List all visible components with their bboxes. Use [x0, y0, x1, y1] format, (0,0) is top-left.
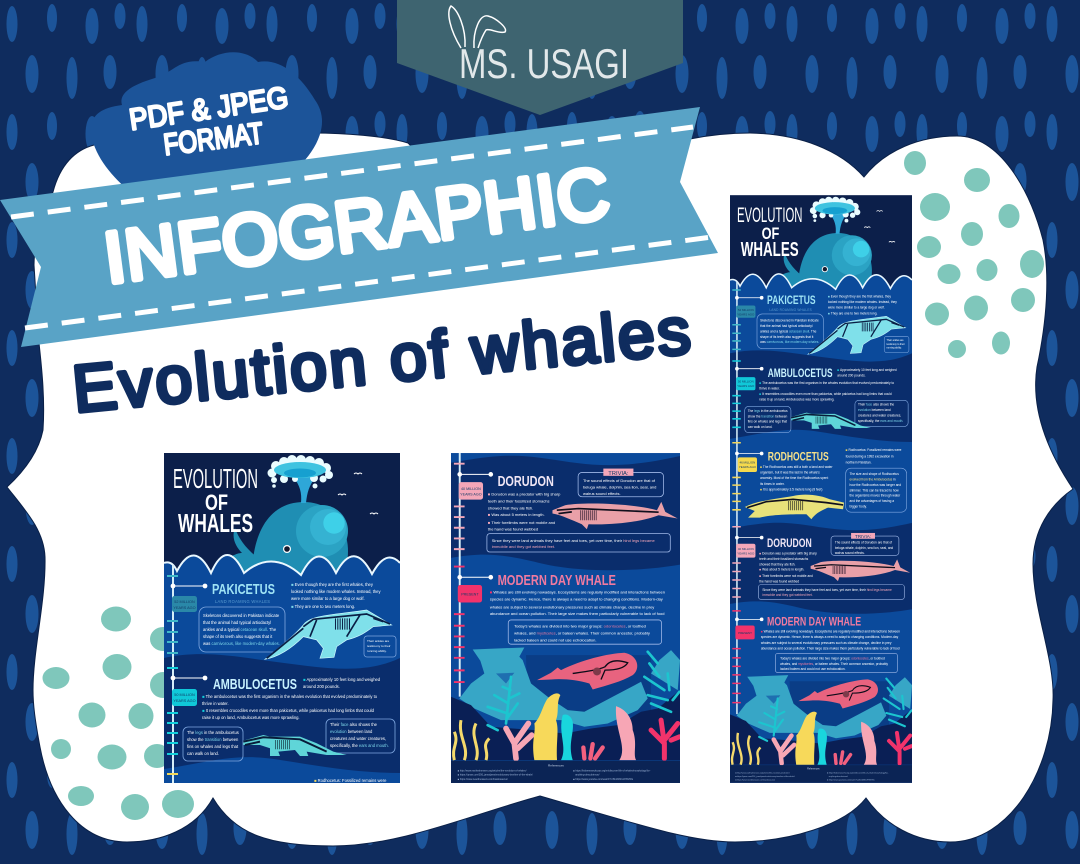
age tag [736, 305, 755, 318]
connector [173, 677, 205, 679]
facts text: ■ It resembles crocodiles even more than pakicetus, while pakicetus had long limbs that could [202, 708, 375, 713]
callout: face: specifically, the ears and mouth. [330, 743, 389, 748]
age tag: PRESENT [461, 593, 479, 597]
callout: skeletons: ankles and a typical cetacean skull. The [203, 627, 277, 632]
age tag [736, 377, 755, 390]
facts text: its times in water. [760, 482, 785, 486]
paragraph: whales are subject to several evolutionary pressures such as climate change, decline in prey [490, 604, 654, 609]
references: References [807, 768, 820, 771]
poster title: EVOLUTION [737, 202, 802, 227]
poster preview 1: top of infographic [164, 453, 400, 783]
heading: DORUDON [767, 538, 812, 550]
callout: size and shape: bigger body. [850, 505, 867, 509]
callout: face [326, 719, 395, 753]
facts text [828, 295, 897, 316]
references [451, 761, 680, 783]
trivia box: beluga whale, dolphin, sea lion, seal, and [583, 484, 656, 489]
poster title: WHALES [741, 239, 799, 261]
paragraph: ■ Whales are still evolving nowadays. Ecosystems are regularly modified and interactions between [490, 590, 665, 595]
facts text: ■ It is approximately 3.5 meters long (8 feet) [760, 488, 822, 492]
facts text: ■ The Rodhocetus was still a both a land and water [760, 465, 833, 469]
callout: skeletons: that the animal had typical artiodactyl [203, 620, 271, 625]
logo: Ms. Usagi [397, 0, 683, 115]
callout: groups [508, 620, 662, 644]
coral: yellow leaf [533, 693, 560, 760]
subtitle: LAND ROAMING WHALES [215, 599, 270, 604]
callout: face: Their face also shows the [330, 722, 378, 727]
night sky [730, 195, 912, 292]
facts text: ■ Was about 5 meters in length. [488, 512, 545, 517]
coral: pink leaf [616, 706, 636, 760]
facts text: ■ They are one to two meters long. [291, 604, 355, 609]
age tag: YEARS AGO [173, 699, 196, 703]
night sky [164, 453, 400, 578]
banner title: INFOGRAPHIC [100, 153, 614, 299]
callout: face: Their face also shows the [858, 403, 894, 407]
coral: yellow seaweed [454, 720, 489, 760]
callout: skeletons: that the animal had typical artiodactyl [760, 324, 813, 328]
callout: skeletons [757, 314, 823, 349]
references [730, 765, 912, 783]
facts text [759, 552, 817, 583]
age tag: YEARS AGO [739, 465, 757, 469]
trivia box: walrus sound effects. [835, 551, 865, 555]
facts text [291, 582, 381, 609]
skeleton: rodhocetus [745, 495, 844, 519]
facts text: showed that they ate fish. [759, 562, 796, 566]
age tag: 50 MILLION [174, 693, 195, 697]
callout: legs [183, 727, 243, 761]
callout: legs: can walk on land. [187, 751, 219, 756]
heading: AMBULOCETUS [768, 368, 833, 380]
facts text: northern Pakistan. [846, 461, 872, 465]
callout: face: evolution between land [330, 729, 373, 734]
facts text: ■ Approximately 10 feet long and weighed [837, 368, 897, 372]
poster title: OF [762, 224, 779, 243]
callout: ankles [364, 636, 396, 657]
skeleton: pakicetus [265, 610, 392, 659]
poster title [173, 463, 258, 538]
age tag [459, 482, 483, 500]
facts text: ■ Was about 5 meters in length. [759, 568, 804, 572]
callout: ankles: running ability. [887, 347, 902, 350]
badge label line 1: PDF & JPEG [127, 81, 290, 137]
age tag: PRESENT [738, 631, 752, 635]
callout: skeletons: ankles and a typical cetacean skull. The [760, 329, 817, 333]
references: ■ http://www.earthwitnesses.org/articles/the-evolution-of-whales/ [735, 772, 790, 775]
callout: skeletons: Skeletons discovered in Pakistan indicate [760, 319, 819, 323]
section: Pakicetus [171, 581, 396, 659]
coral: left teal kelp [488, 677, 519, 730]
coral: cyan kelp [561, 715, 573, 760]
heading: DORUDON [498, 474, 554, 490]
teaser: Rodhocetus text: ■ Rodhocetus: Fossilized remains were [314, 778, 387, 783]
age tag [172, 596, 197, 612]
age tag: 52 MILLION [174, 600, 195, 604]
callout: face: evolution between land [858, 408, 891, 412]
callout: skeletons: was carnivorous, like modern-day whales. [760, 340, 819, 344]
callout: legs [745, 406, 791, 433]
age tag: YEARS AGO [737, 552, 755, 556]
callout: face [855, 400, 908, 427]
coral: red branch [651, 720, 679, 758]
age tag [172, 689, 197, 706]
references: ■ https://qmaz.com/356_jama/jama/evolutionary-timeline-of-the-whale/ [458, 774, 533, 777]
paragraph [490, 590, 665, 616]
facts text: looked nothing like modern whales. Instead, they [828, 300, 897, 304]
references: ■ https://qmaz.com/356_jama/jama/evolutionary-timeline-of-the-whale/ [735, 775, 795, 778]
facts text: thrive in water. [202, 701, 229, 706]
teal dots: right group [904, 151, 1044, 358]
section: Dorudon [735, 533, 910, 599]
facts text [202, 677, 381, 720]
poster preview 3: full-length infographic [730, 195, 912, 783]
seabed illustration [451, 647, 680, 760]
trivia box [831, 533, 899, 555]
callout: size and shape: slimmer. This can be traced to how [850, 488, 899, 492]
section: Modern day whale [457, 573, 665, 644]
facts text [488, 492, 561, 532]
age tag: YEARS AGO [460, 493, 482, 497]
callout: face: specifically, the ears and mouth. [858, 419, 903, 423]
callout: legs: can walk on land. [748, 425, 772, 429]
facts text: ancestry. Most of the time the Rodhocetus spent [760, 476, 828, 480]
callout: legs: show the transition between [187, 737, 239, 742]
connector [460, 576, 491, 578]
subtitle: Evolution of whales [69, 293, 693, 426]
subtitle: LAND ROAMING WHALES [769, 308, 812, 312]
coral: small red [583, 744, 603, 758]
facts text: teeth and their fossilized stomachs [488, 499, 549, 504]
callout: groups: lacked baleen and could not use echolocation. [514, 637, 596, 642]
callout: legs: Since they were land animals they have feet and toes, yet over time, their hind legs became [762, 588, 892, 592]
connector [460, 473, 491, 475]
callout: ankles: Their ankles are [367, 639, 389, 643]
trivia box: TRIVIA: [855, 534, 871, 539]
paragraph: abundance and ocean pollution. Their large size makes them particularly vulnerable to lack of food [490, 611, 665, 616]
poster title: WHALES [178, 508, 253, 538]
callout: skeletons: shape of its teeth also suggests that it [203, 634, 273, 639]
poster title: EVOLUTION [173, 463, 258, 494]
facts text: ■ Approximately 10 feet long and weighed [303, 677, 381, 682]
facts text: around 200 pounds. [837, 373, 866, 377]
heading: AMBULOCETUS [213, 676, 297, 693]
references: ■ https://www.newdinosaurs.com/basilosaurus/ [735, 779, 775, 782]
callout: groups: Today's whales are divided into two major groups: odontocetes, or toothed [780, 656, 885, 660]
section: Ambulocetus [735, 367, 908, 433]
whale illustration [770, 197, 895, 291]
facts text [760, 448, 902, 492]
age tag [735, 626, 755, 639]
poster preview 2: bottom of infographic [451, 453, 680, 783]
callout: groups: lacked baleen and could not use echolocation. [780, 667, 846, 671]
pink whale [537, 653, 637, 689]
badge: PDF and JPEG format [90, 52, 322, 200]
timeline [167, 565, 178, 783]
section: Pakicetus [735, 295, 909, 354]
logo rabbit ears [449, 6, 505, 48]
callout: face: creatures and water creatures, [330, 736, 386, 741]
ocean body with scalloped waves [164, 555, 400, 783]
skeleton: pakicetus [808, 316, 906, 354]
facts text: ■ Even though they are the first whales, they [828, 295, 891, 299]
trivia box: The sound effects of Dorudon are that of [835, 541, 892, 545]
ocean bands [451, 453, 680, 783]
age tag: 40 MILLION [738, 547, 754, 551]
callout: size and shape: the organisms moves through water [850, 494, 901, 498]
callout: groups: whales, and mysticetes, or baleen whales. Their common ancestor, probably [514, 630, 650, 635]
references: ■ https://kidsresearchcorp.org/en/discover/life-of-whales/morphology/for- [573, 769, 651, 772]
seabed illustration [730, 675, 912, 765]
age tag [736, 544, 755, 558]
section: Ambulocetus [171, 676, 395, 761]
callout: legs [759, 585, 904, 599]
callout: legs: fins on whales and legs that [187, 744, 239, 749]
connector [737, 368, 762, 370]
whale illustration [216, 455, 378, 577]
age tag: YEARS AGO [737, 384, 755, 388]
connector [737, 453, 762, 455]
references: References [548, 763, 564, 767]
age tag: 40 MILLION [461, 487, 481, 491]
callout: size and shape [846, 468, 907, 512]
callout: legs: immobile and they got webbed feet. [762, 593, 813, 597]
coral: right teal kelp [644, 652, 679, 712]
logo wordmark: MS. USAGI [459, 40, 629, 87]
callout: legs: fins on whales and legs that [748, 420, 787, 424]
connector [737, 618, 762, 620]
facts text: were more similar to a large dog or wolf. [291, 596, 365, 601]
callout: ankles: Their ankles are [887, 339, 904, 342]
section: Rodhocetus [735, 448, 907, 519]
callout: size and shape: evolved from the Ambulocetus in [850, 478, 896, 482]
skeleton: dorudon [811, 559, 910, 581]
callout: face: creatures and water creatures, [858, 414, 901, 418]
paragraph: ■ Whales are still evolving nowadays. Ecosystems are regularly modified and interactions between [761, 629, 900, 633]
heading: MODERN DAY WHALE [767, 616, 861, 628]
callout: legs: The legs in the ambulocetus [187, 730, 239, 735]
trivia box: beluga whale, dolphin, sea lion, seal, and [835, 546, 893, 550]
trivia box [578, 469, 664, 497]
facts text: ■ The ambulocetus was the first organism in the whales evolution that evolved predominately to [202, 694, 378, 699]
facts text: ■ Dorudon was a predator with big sharp [759, 552, 817, 556]
facts text: ■ The ambulocetus was the first organism in the whales evolution that evolved predominately to [759, 381, 894, 385]
skeleton: ambulocetus [791, 413, 871, 429]
facts text: organism, but it was the last in the whale's [760, 471, 820, 475]
callout: legs [487, 534, 670, 552]
callout: ankles: testimony to their [367, 644, 391, 648]
age tag: 52 MILLION [738, 308, 754, 312]
callout: skeletons: was carnivorous, like modern-day whales. [203, 641, 280, 646]
paragraph: abundance and ocean pollution. Their large size makes them particularly vulnerable to lack of food [761, 646, 900, 650]
references: ■ https://www.youtube.com/watch?v=8b1bf3Ko9YBVtRs [573, 778, 634, 781]
facts text: ■ Rodhocetus: Fossilized remains were [846, 448, 902, 452]
coral: pink branch [506, 723, 532, 758]
callout: skeletons [199, 607, 285, 652]
callout: legs: The legs in the ambulocetus [748, 409, 788, 413]
references: ■ https://www.youtube.com/watch?v=8b1bf3Ko9YBVtRs [827, 779, 875, 782]
facts text: the hand was found webbed [488, 527, 538, 532]
paragraph [761, 629, 900, 650]
facts text: looked nothing like modern whales. Instead, they [291, 589, 381, 594]
callout: groups [776, 653, 897, 673]
callout: groups: whales, and mysticetes, or baleen whales. Their common ancestor, probably [780, 662, 888, 666]
skeleton: ambulocetus [243, 735, 347, 756]
poster title: OF [205, 490, 228, 515]
callout: size and shape: how the Rodhocetus was longer and [850, 483, 901, 487]
paragraph: species are dynamic. Hence, there is always a need to adapt to changing conditions. Modern-day [761, 635, 899, 639]
heading: PAKICETUS [767, 295, 816, 307]
trivia box: walrus sound effects. [583, 491, 621, 496]
age tag [738, 457, 757, 472]
facts text: were more similar to a large dog or wolf. [828, 306, 885, 310]
references: ■ http://www.earthwitnesses.org/articles/the-evolution-of-whales/ [458, 769, 527, 772]
heading: MODERN DAY WHALE [498, 573, 616, 589]
facts text: ■ Their forelimbs were not mobile and [488, 520, 555, 525]
heading: PAKICETUS [212, 581, 275, 598]
callout: legs: immobile and they got webbed feet. [492, 544, 555, 549]
section: Modern day whale [735, 616, 900, 673]
age tag [458, 585, 482, 602]
timeline [454, 453, 465, 697]
facts text: showed that they ate fish. [488, 505, 533, 510]
facts text: found during a 1992 excavation in [846, 454, 894, 458]
age tag: 46 MILLION [739, 461, 755, 465]
poster title [737, 202, 802, 261]
callout: ankles: testimony to their [887, 343, 905, 346]
paragraph: whales are subject to several evolutionary pressures such as climate change, decline in prey [761, 641, 892, 645]
trivia box: TRIVIA: [608, 471, 629, 477]
ocean body with scalloped waves [730, 274, 912, 783]
trivia box: The sound effects of Dorudon are that of [583, 478, 656, 483]
age tag: YEARS AGO [737, 312, 755, 316]
references: ■ https://kidsresearchcorp.org/en/discover/life-of-whales/morphology/for- [827, 772, 889, 775]
connector [173, 585, 205, 587]
references: anything-descubrimos/ [829, 775, 848, 778]
callout: skeletons: shape of its teeth also suggests that it [760, 335, 814, 339]
references: anything-descubrimos/ [575, 774, 600, 777]
facts text [759, 368, 897, 401]
callout: ankles: running ability. [367, 649, 387, 653]
facts text: ■ They are one to two meters long. [828, 312, 877, 316]
age tag: 50 MILLION [738, 380, 754, 384]
heading: RODHOCETUS [768, 451, 829, 463]
section: Dorudon [457, 469, 678, 552]
connector [737, 537, 762, 539]
age tag: YEARS AGO [173, 606, 196, 610]
facts text: ■ Dorudon was a predator with big sharp [488, 492, 561, 497]
callout: legs: Since they were land animals they have feet and toes, yet over time, their hind legs became [492, 538, 655, 543]
facts text: the hand was found webbed [759, 579, 799, 583]
callout: legs: show the transition between [748, 414, 787, 418]
facts text: around 200 pounds. [303, 684, 340, 689]
teal dots: left group [42, 606, 194, 820]
callout: ankles [884, 336, 909, 352]
facts text: raise it up on land, Ambulocetus was more sprawling. [202, 715, 300, 720]
facts text: ■ Even though they are the first whales, they [291, 582, 374, 587]
facts text: thrive in water. [759, 387, 780, 391]
facts text: ■ Their forelimbs were not mobile and [759, 574, 813, 578]
timeline [732, 282, 741, 714]
facts text: ■ It resembles crocodiles even more than pakicetus, while pakicetus had long limbs that could [759, 392, 892, 396]
badge label line 2: FORMAT [162, 117, 265, 162]
callout: skeletons: Skeletons discovered in Pakistan indicate [203, 613, 280, 618]
facts text: raise it up on land, Ambulocetus was more sprawling. [759, 397, 835, 401]
connector [737, 297, 762, 299]
callout: groups: Today's whales are divided into two major groups: odontocetes, or toothed [514, 624, 646, 629]
references: ■ https://www.newdinosaurs.com/basilosaurus/ [458, 778, 508, 781]
callout: size and shape: and the advantages of having a [850, 499, 894, 503]
paragraph: species are dynamic. Hence, there is always a need to adapt to changing conditions. Modern-day [490, 597, 663, 602]
callout: size and shape: The size and shape of Rodhocetus [850, 472, 899, 476]
skeleton: dorudon [552, 502, 678, 529]
facts text: teeth and their fossilized stomachs [759, 557, 809, 561]
ribbon banner [0, 107, 718, 347]
